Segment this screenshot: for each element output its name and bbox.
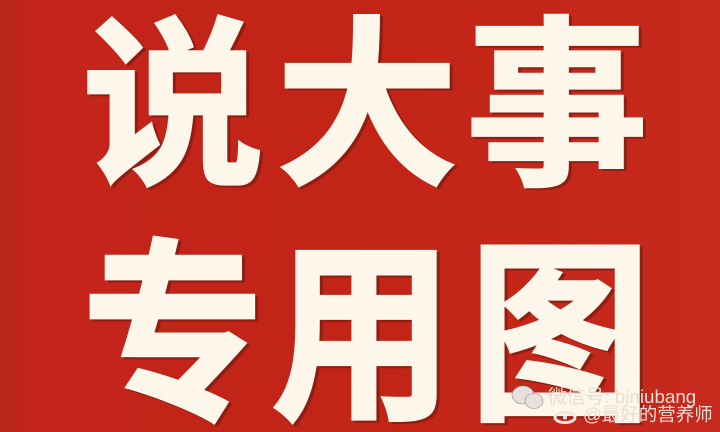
title: line one: [82, 5, 651, 211]
icon: weibo logo: [555, 412, 575, 422]
watermark: weibo handle: @最好的营养师: [583, 404, 713, 425]
title: line one: 事: [466, 5, 648, 209]
title: line one: 大: [279, 7, 461, 211]
title: line one: 大: [276, 5, 458, 209]
title: line two: [82, 227, 654, 432]
watermark: wechat id: 微信号: bjniubang: [548, 386, 696, 407]
title: line one: 事: [469, 7, 651, 211]
title: line one: 说: [82, 5, 264, 209]
title: line one: 说: [85, 7, 267, 211]
icon: wechat logo: [512, 386, 543, 408]
